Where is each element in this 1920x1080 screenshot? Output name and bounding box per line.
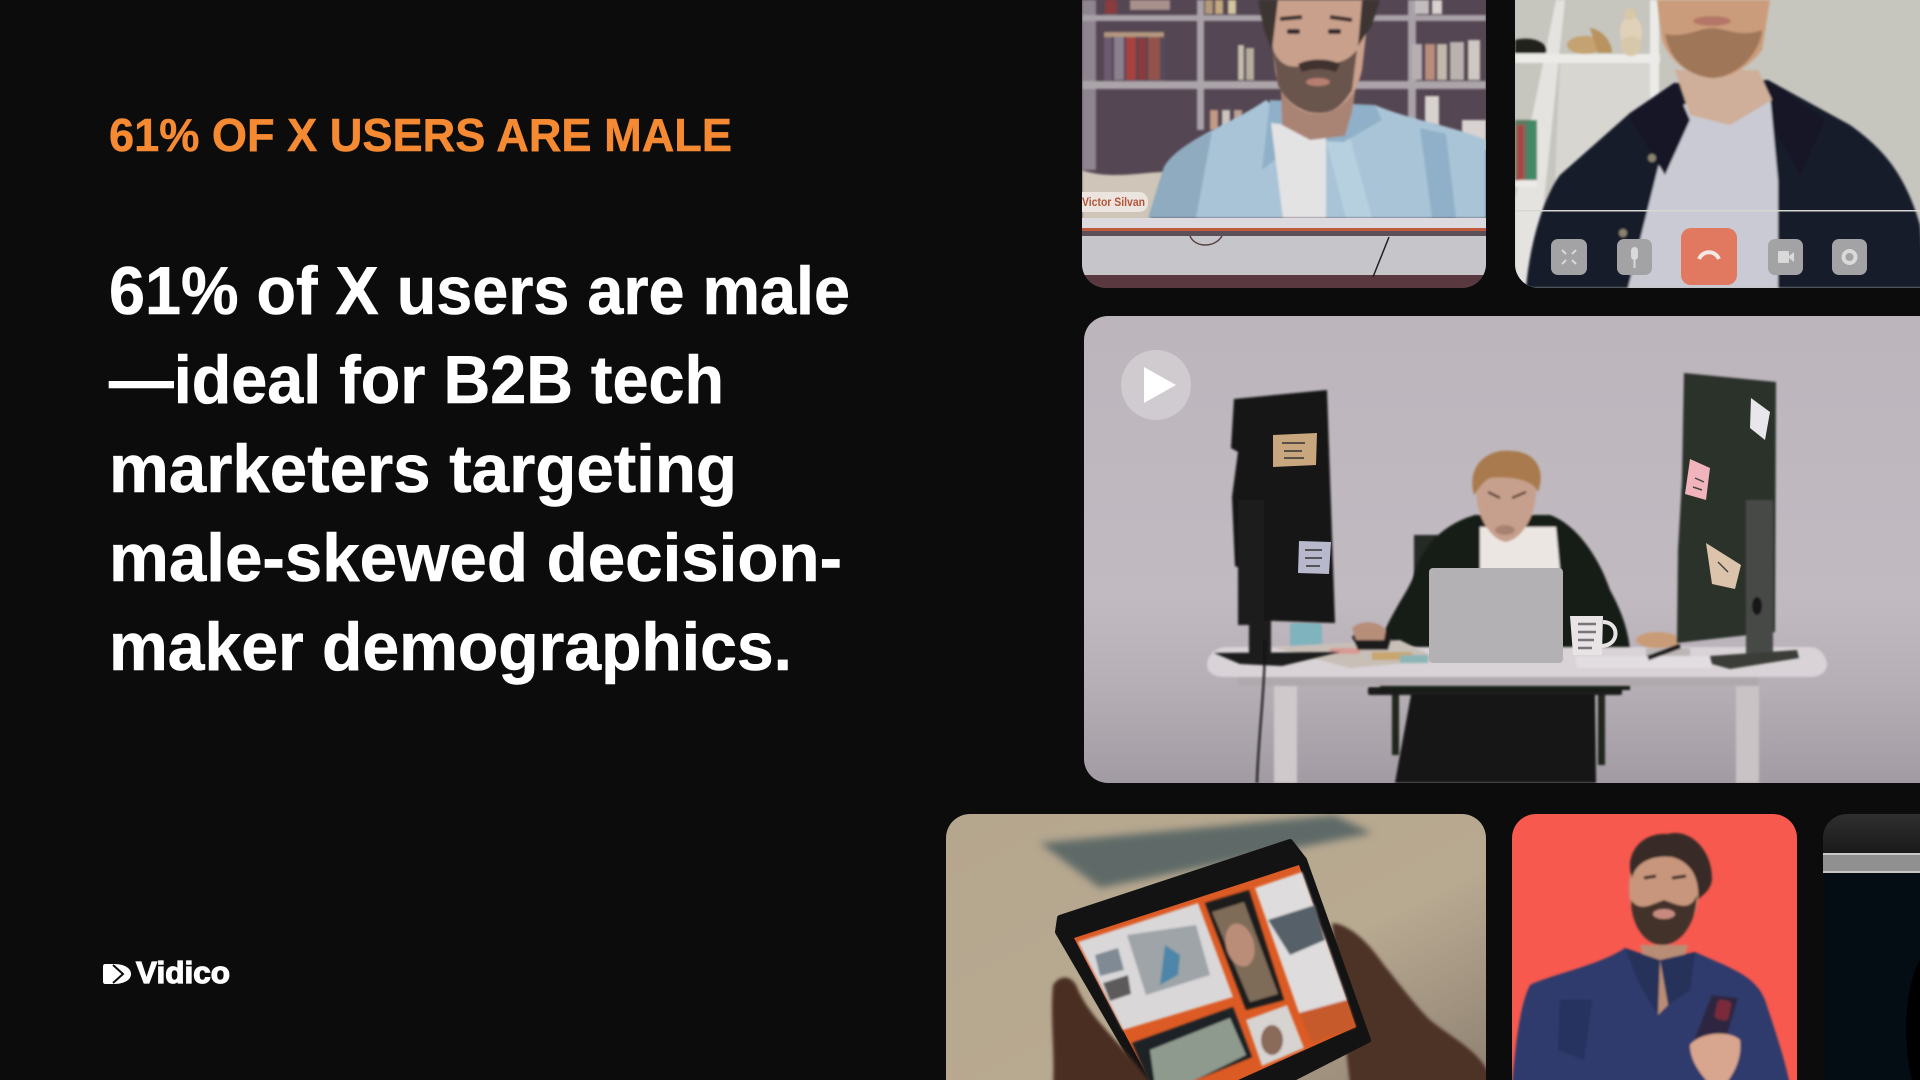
sticky notes on left monitor	[1273, 433, 1331, 574]
main statement text: maker demographics.	[109, 609, 792, 685]
head	[1628, 855, 1700, 914]
panel: hands holding tablet	[946, 814, 1490, 1080]
man legs and chair	[1368, 535, 1622, 783]
sofa cushion	[1082, 170, 1165, 220]
coffee mug	[1570, 616, 1616, 655]
phone and hand	[1694, 994, 1738, 1040]
blurred object on table	[1040, 815, 1372, 888]
laptop	[1429, 568, 1563, 663]
logo: Vidico	[103, 955, 230, 990]
right monitor	[1677, 373, 1799, 669]
white shelves and ornaments	[1515, 0, 1660, 288]
man with jacket	[1526, 0, 1920, 288]
icon: settings button	[1832, 239, 1867, 275]
main statement text: 61% of X users are male	[109, 253, 850, 329]
name tag: Victor Silvan	[1082, 192, 1148, 212]
desk laptop edge	[1082, 218, 1486, 288]
main statement text	[109, 253, 850, 685]
panel: video call man with denim shirt	[1070, 0, 1486, 288]
man in denim shirt	[1148, 0, 1486, 218]
panel: man on red background holding phone	[1512, 814, 1797, 1080]
icon: hang up button	[1681, 228, 1737, 285]
tablet screen cards	[1078, 872, 1356, 1080]
main statement text: —ideal for B2B tech	[109, 342, 724, 418]
main statement text: marketers targeting	[109, 431, 737, 507]
sticky notes on right monitor	[1685, 398, 1770, 589]
eyebrow heading: 61% OF X USERS ARE MALE	[109, 109, 732, 161]
left monitor	[1214, 390, 1340, 783]
icon: logo play mark	[103, 964, 131, 984]
panel: video call man with dark jacket and controls	[1515, 0, 1920, 288]
icon: fullscreen button	[1551, 239, 1587, 275]
left hand	[1052, 978, 1152, 1080]
right hand	[1332, 923, 1490, 1080]
desk	[1207, 647, 1827, 783]
desk clutter	[1272, 622, 1713, 668]
icon: microphone button	[1617, 239, 1652, 275]
shirt	[1512, 948, 1790, 1080]
tablet	[1058, 842, 1368, 1080]
logo wordmark: Vidico	[136, 955, 230, 990]
icon: play button	[1121, 350, 1191, 420]
icon: camera button	[1768, 239, 1803, 275]
panel: frustrated man at desk video	[1084, 316, 1920, 783]
panel: dark cropped video	[1823, 814, 1920, 1080]
bookshelf	[1082, 0, 1486, 170]
call controls	[1551, 228, 1867, 285]
name tag: Victor Silvan: Victor Silvan	[1082, 197, 1145, 209]
man upper body	[1380, 451, 1630, 690]
divider line	[1515, 210, 1920, 212]
main statement text: male-skewed decision-	[109, 520, 842, 596]
